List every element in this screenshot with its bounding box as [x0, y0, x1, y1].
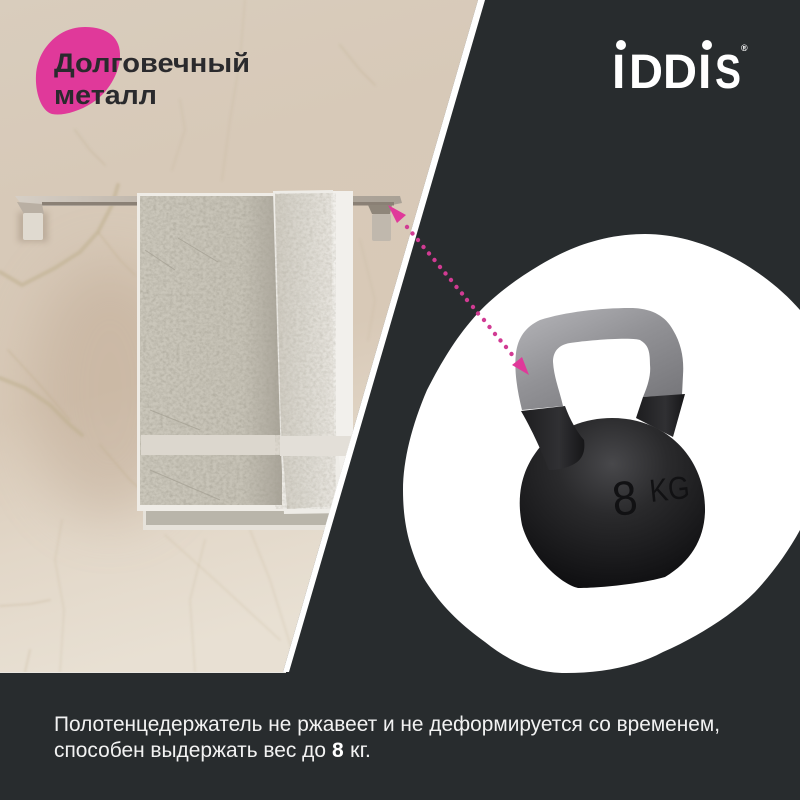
- towel wrinkles: [145, 238, 220, 500]
- top arrowhead: [388, 205, 406, 223]
- towel rail: [15, 196, 402, 242]
- rail shadow: [18, 212, 48, 242]
- icon: kettlebell 8 kg: [515, 308, 705, 588]
- bottom arrowhead: [512, 357, 529, 375]
- caption text: Полотенцедержатель не ржавеет и не деформируется со временем,: [54, 713, 720, 736]
- white diagonal divider: [283, 0, 485, 672]
- towel: [137, 190, 355, 530]
- caption text: 8: [332, 739, 344, 762]
- logo: iDDiS: I: [612, 46, 625, 99]
- left bracket: [17, 202, 44, 240]
- kettlebell right collar: [636, 394, 685, 437]
- towel back fold: [143, 511, 329, 530]
- kettlebell handle: [515, 308, 683, 410]
- heading: Долговечный: [54, 48, 250, 78]
- right bracket: [368, 205, 392, 241]
- heading: [54, 48, 250, 110]
- towel white back edge: [330, 191, 353, 508]
- logo: iDDiS: [612, 40, 748, 99]
- arrow: dotted double-headed pointer: [388, 205, 529, 375]
- heading: металл: [54, 80, 157, 110]
- kettlebell left collar: [521, 406, 584, 470]
- logo: iDDiS: S: [715, 46, 741, 99]
- caption text: кг.: [350, 739, 371, 762]
- logo: iDDiS: DD: [629, 46, 697, 99]
- caption text: способен выдержать вес до: [54, 739, 326, 762]
- kettlebell weight label: KG: [648, 469, 691, 509]
- panel: white blob background: [403, 234, 800, 673]
- towel overlapping fold: [273, 190, 345, 514]
- logo: iDDiS: ®: [741, 43, 748, 53]
- rail bar: [15, 196, 402, 206]
- kettlebell ball: [520, 418, 705, 588]
- kettlebell weight label: 8: [610, 471, 640, 527]
- kettlebell weight label: [610, 466, 693, 527]
- panel: marble wall photo: [0, 0, 490, 672]
- pink blob: [36, 27, 120, 115]
- logo: iDDiS: I: [698, 46, 711, 99]
- towel main panel: [137, 193, 287, 511]
- towel stripe: [141, 435, 282, 455]
- caption text: [54, 713, 720, 762]
